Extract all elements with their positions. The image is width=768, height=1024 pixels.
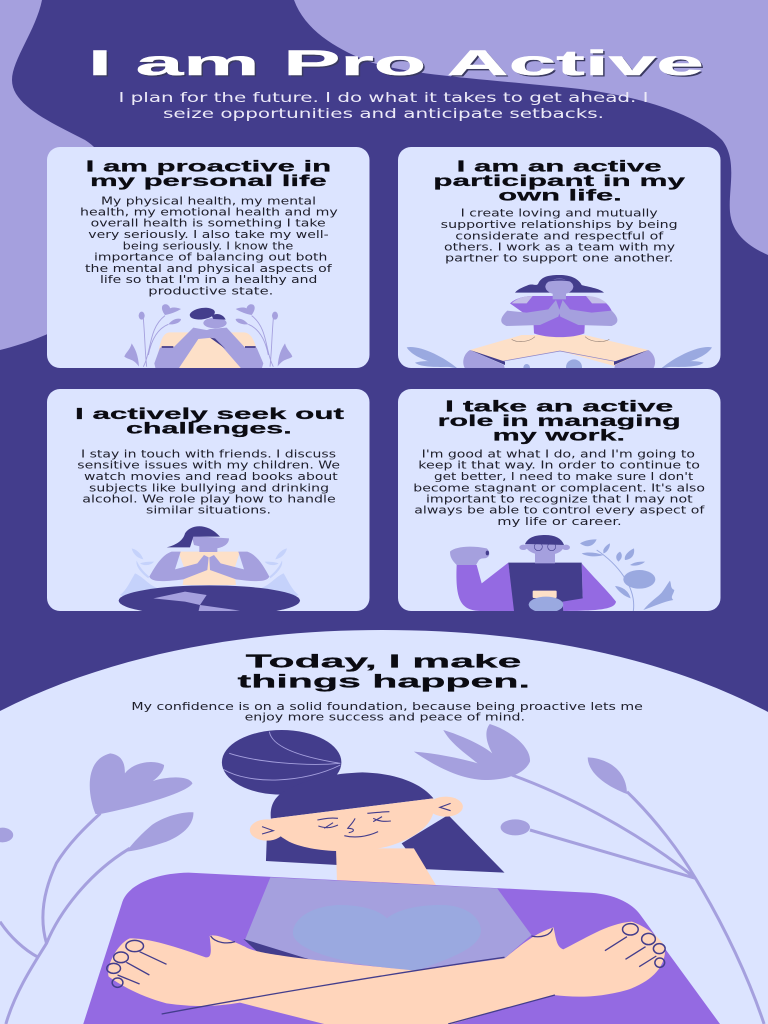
illustration: person resting on crossed arms with flowers <box>124 304 292 369</box>
hair back <box>266 815 504 873</box>
card background <box>398 389 720 611</box>
title: I am Pro Active <box>90 46 706 84</box>
body text: being seriously. I know the <box>123 239 294 252</box>
right flowers <box>414 724 764 1024</box>
illustration: person in wide-leg yoga pose <box>407 275 712 375</box>
body text: keep it that way. In order to continue to <box>418 459 700 472</box>
body text: I stay in touch with friends. I discuss <box>81 447 336 460</box>
body text: I'm good at what I do, and I'm going to <box>422 448 695 461</box>
heading: I am an active <box>457 159 662 176</box>
body text: I create loving and mutually <box>461 207 658 220</box>
subtitle <box>118 90 648 122</box>
panel: seek out challenges <box>47 389 370 616</box>
subtitle: I plan for the future. I do what it takes to get ahead. I <box>118 90 648 106</box>
top hair <box>271 772 433 819</box>
heading <box>438 399 681 445</box>
body text: the mental and physical aspects of <box>85 262 333 275</box>
body text: get better, I need to make sure I don't <box>434 470 694 483</box>
subtitle: seize opportunities and anticipate setbacks. <box>163 106 604 122</box>
body text: life so that I'm in a healthy and <box>100 273 317 286</box>
heart <box>293 905 481 971</box>
body text: similar situations. <box>146 504 271 517</box>
heading: role in managing <box>438 413 681 430</box>
background: bottom light dome <box>0 630 768 1024</box>
left flowers <box>0 753 193 1024</box>
body text <box>77 447 340 517</box>
body text: partner to support one another. <box>445 251 673 264</box>
body text: health, my emotional health and my <box>80 205 338 218</box>
body text: always be able to control every aspect of <box>414 504 706 517</box>
body text <box>413 448 706 528</box>
face <box>250 797 463 851</box>
body text <box>441 207 678 264</box>
title <box>88 44 706 84</box>
panel: active participant <box>398 147 720 375</box>
body text: alcohol. We role play how to handle <box>82 492 336 505</box>
title: I am Pro Active <box>88 44 704 83</box>
heading: my personal life <box>90 173 327 190</box>
body text: watch movies and read books about <box>84 470 339 483</box>
heading <box>75 406 344 438</box>
chest panel <box>245 877 531 971</box>
bun <box>222 730 341 795</box>
heading <box>433 159 686 205</box>
background: top-left light shape <box>0 0 118 350</box>
shirt <box>83 873 720 1024</box>
neck <box>336 848 437 887</box>
body text: overall health is something I take <box>91 217 326 230</box>
heading: participant in my <box>433 173 686 190</box>
section body text: My confidence is on a solid foundation, because being proactive lets me <box>131 700 643 713</box>
body text: importance of balancing out both <box>94 251 327 264</box>
section body text: enjoy more success and peace of mind. <box>245 711 525 724</box>
heading <box>86 159 331 190</box>
body text: considerate and respectful of <box>455 229 665 242</box>
body text: subjects like bullying and drinking <box>89 481 329 494</box>
body text: others. I work as a team with my <box>444 240 676 253</box>
heading: my work. <box>493 428 625 445</box>
body text: sensitive issues with my children. We <box>77 459 340 472</box>
body text: supportive relationships by being <box>441 218 678 231</box>
heading: I take an active <box>445 399 674 416</box>
illustration: person meditating cross-legged <box>119 526 300 616</box>
body text: productive state. <box>148 284 273 297</box>
section heading: today: things happen. <box>238 671 530 692</box>
crossed arms <box>107 922 665 1024</box>
section heading: today <box>238 650 530 692</box>
panel: managing my work <box>398 389 720 613</box>
section body text <box>131 700 643 724</box>
card background <box>398 147 720 368</box>
section heading: today: Today, I make <box>246 650 521 671</box>
heading: I am proactive in <box>86 159 331 176</box>
illustration: person holding a tablet and cup <box>450 535 674 613</box>
card background <box>47 147 370 368</box>
illustration: woman hugging herself with flowers <box>0 724 764 1024</box>
body text <box>80 194 338 297</box>
body text: become stagnant or complacent. It's also <box>413 481 705 494</box>
shadow under arm <box>243 939 310 959</box>
card background <box>47 389 370 611</box>
body text: important to recognize that I may not <box>426 492 694 505</box>
heading: I actively seek out <box>75 406 344 423</box>
background: top-right light shape <box>294 0 768 255</box>
panel: personal life <box>47 147 370 369</box>
body text: My physical health, my mental <box>101 194 316 207</box>
heading: challenges. <box>126 421 292 438</box>
body text: very seriously. I also take my well- <box>88 228 329 241</box>
body text: my life or career. <box>497 515 622 528</box>
heading: own life. <box>498 188 622 205</box>
